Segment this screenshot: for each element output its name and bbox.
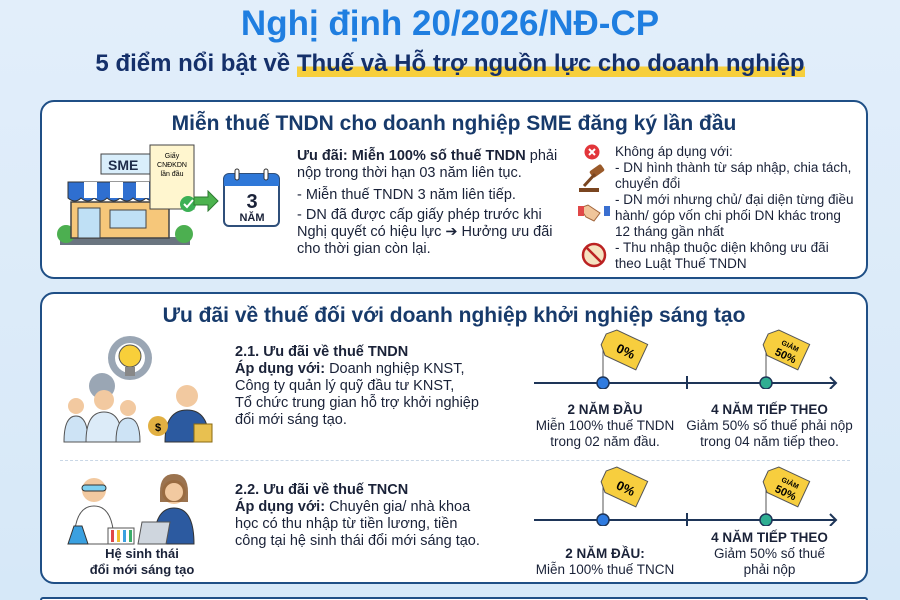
panel: SME tax exemption (40, 100, 868, 279)
text block: benefits (297, 146, 557, 257)
timeline 2.2: GIẢM (780, 475, 801, 491)
text block: 2.1: 2.1. Ưu đãi về thuế TNDN (235, 344, 408, 360)
label: 2 years (536, 402, 674, 449)
subtitle: 5 điểm nổi bật về Thuế và Hỗ trợ nguồn lực cho doanh nghiệp (95, 50, 805, 77)
icon: store with certificate: Giấy (165, 151, 180, 160)
text block: not applicable: 12 tháng gần nhất (615, 224, 724, 239)
text block: benefits: - Miễn thuế TNDN 3 năm liên tiếp. (297, 187, 516, 203)
timeline 2.1: 50% (773, 346, 798, 366)
icon: calendar 3 years: 3 (246, 191, 258, 213)
divider (60, 460, 850, 461)
text block: benefits: nộp trong thời hạn 03 năm liên tục. (297, 165, 522, 181)
label: 4 years TNCN: 4 NĂM TIẾP THEO (711, 530, 828, 545)
icon: team with lightbulb and investor: $ (155, 422, 161, 434)
text block: 2.2: 2.2. Ưu đãi về thuế TNCN (235, 482, 408, 498)
icon: calendar 3 years: NĂM (239, 211, 265, 224)
text block: 2.2 (235, 482, 480, 549)
title: Nghị định 20/2026/NĐ-CP (241, 4, 659, 43)
timeline 2.1 (534, 330, 838, 389)
label: 2 years: trong 02 năm đầu. (550, 434, 660, 449)
label: 4 years TNCN: Giảm 50% số thuế (714, 546, 825, 561)
text block: 2.1 (235, 344, 479, 428)
icon: handshake (578, 204, 610, 222)
label: 2 years TNCN: Miễn 100% thuế TNCN (536, 562, 674, 577)
text block: not applicable: hành/ góp vốn chi phối DN khác trong (615, 208, 841, 223)
label: 2 years TNCN (536, 546, 674, 577)
text block: 2.1: đổi mới sáng tạo. (235, 412, 347, 428)
icon: store with certificate: CNĐKDN (157, 162, 187, 169)
icon: store with certificate: SME (108, 157, 138, 173)
label: 4 years TNCN (711, 530, 828, 577)
icons: exclusions (578, 144, 610, 268)
icon: calendar 3 years (223, 168, 280, 227)
text block: 2.2: Áp dụng với: Chuyên gia/ nhà khoa (235, 499, 470, 515)
icon: team with lightbulb and investor (64, 336, 212, 442)
text block: not applicable: - DN hình thành từ sáp nhập, chia tách, (615, 160, 851, 175)
text block: 2.1: Áp dụng với: Doanh nghiệp KNST, (235, 361, 464, 377)
arrow (194, 190, 219, 212)
text block: benefits: Ưu đãi: Miễn 100% số thuế TNDN phải (297, 148, 557, 164)
timeline 2.2: 0% (614, 478, 638, 499)
timeline 2.1: 0% (614, 341, 638, 362)
label: 4 years: 4 NĂM TIẾP THEO (711, 402, 828, 417)
label: ecosystem: đổi mới sáng tạo (90, 562, 194, 577)
timeline 2.1: GIẢM (780, 338, 801, 354)
label: ecosystem: Hệ sinh thái (105, 546, 179, 561)
label: 4 years: Giảm 50% số thuế phải nộp (686, 418, 853, 433)
text block: not applicable: - Thu nhập thuộc diện không ưu đãi (615, 240, 829, 255)
label: ecosystem (90, 546, 194, 577)
panel: innovative startups (40, 292, 868, 584)
text block: benefits: - DN đã được cấp giấy phép trước khi (297, 207, 542, 223)
text block: benefits: Nghị quyết có hiệu lực ➔ Hưởng ưu đãi (297, 224, 553, 240)
heading: Miễn thuế TNDN cho doanh nghiệp SME đăng ký lần đầu (172, 112, 736, 135)
label: 2 years TNCN: 2 NĂM ĐẦU: (565, 546, 645, 561)
text block: not applicable: theo Luật Thuế TNDN (615, 256, 747, 271)
timeline 2.2: 50% (773, 483, 798, 503)
icon: prohibited (582, 242, 606, 268)
icon: scientist and worker (67, 474, 194, 544)
label: 2 years: 2 NĂM ĐẦU (567, 402, 642, 417)
icon: gavel (579, 164, 604, 192)
text block: 2.1: Tổ chức trung gian hỗ trợ khởi nghiệp (235, 395, 479, 411)
icon: store with certificate: lần đầu (161, 169, 184, 178)
label: 4 years (686, 402, 853, 449)
text block: 2.2: công tại hệ sinh thái đổi mới sáng tạo. (235, 533, 480, 549)
text block: not applicable (615, 144, 854, 271)
text block: not applicable: - DN mới nhưng chủ/ đại diện từng điều (615, 192, 854, 207)
text block: 2.2: học có thu nhập từ tiền lương, tiền (235, 516, 457, 532)
icon: x mark (584, 144, 600, 160)
text block: benefits: cho thời gian còn lại. (297, 241, 431, 257)
label: 4 years: trong 04 năm tiếp theo. (700, 434, 839, 449)
text block: not applicable: chuyển đổi (615, 176, 680, 191)
label: 2 years: Miễn 100% thuế TNDN (536, 418, 674, 433)
label: 4 years TNCN: phải nộp (744, 562, 795, 577)
text block: not applicable: Không áp dụng với: (615, 144, 733, 159)
panel: next section (cut off) (40, 597, 868, 600)
timeline 2.2 (534, 466, 838, 526)
heading: Ưu đãi về thuế đối với doanh nghiệp khởi nghiệp sáng tạo (163, 304, 745, 327)
icon: store with certificate (57, 144, 196, 245)
text block: 2.1: Công ty quản lý quỹ đầu tư KNST, (235, 378, 454, 394)
